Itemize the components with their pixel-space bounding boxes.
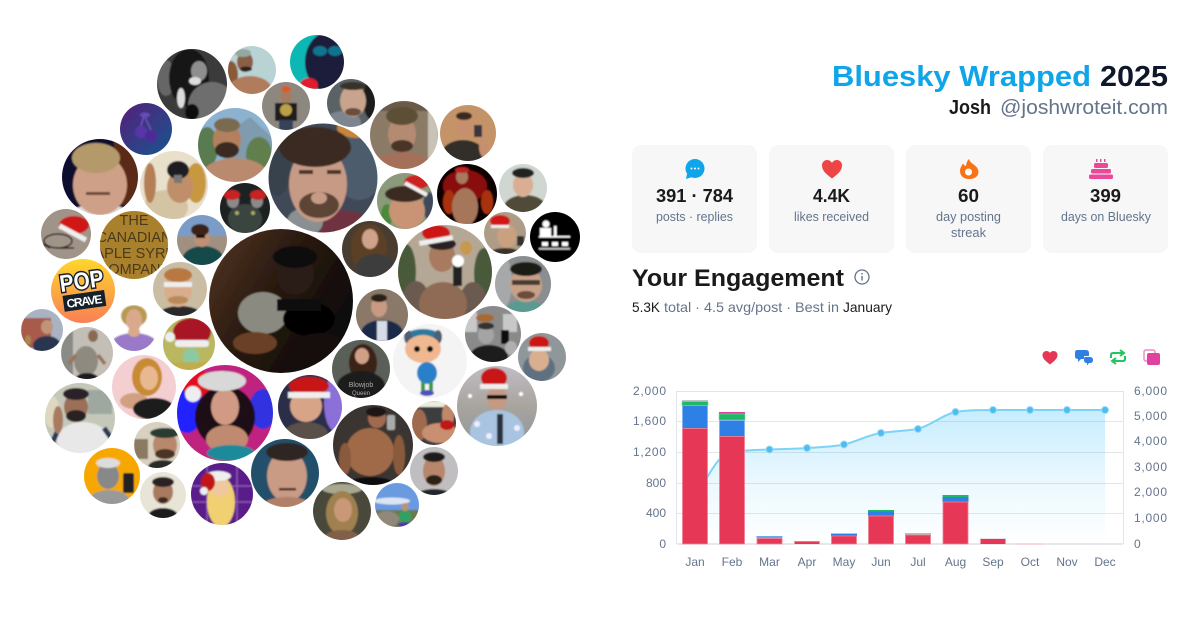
chart legend icons <box>1042 350 1160 366</box>
avatar: man in snow with santa hat <box>452 361 542 454</box>
avatar: cat with santa hats <box>220 183 270 233</box>
avatar: Squidward with santa hat <box>163 318 215 370</box>
bar: July <box>905 533 931 544</box>
month labels: Jul <box>910 555 926 569</box>
panel: posts and replies <box>632 145 757 253</box>
bar: August <box>942 495 968 544</box>
avatar: man in olive sweater <box>499 164 547 212</box>
icon: speech bubble <box>686 159 704 179</box>
avatar: man selfie in tank top <box>140 151 208 219</box>
bar: April <box>794 541 820 544</box>
avatar: bearded man in mountains <box>198 108 272 182</box>
month labels: May <box>833 555 855 569</box>
avatar: person on rocky beach <box>370 478 424 532</box>
stat label second line: streak <box>951 226 987 240</box>
bar: October <box>1017 544 1043 545</box>
avatar: curly haired man large <box>268 124 378 232</box>
right axis labels: 1,000 <box>1134 511 1167 525</box>
avatar: woman in black hoodie: Blowjob <box>349 382 373 389</box>
month labels: Jun <box>871 555 891 569</box>
avatar: Animal Crossing villager <box>393 324 467 398</box>
month labels: Dec <box>1094 555 1116 569</box>
avatar: blonde woman purple dress <box>114 305 154 351</box>
icon: flame centre <box>965 168 972 176</box>
month labels: Jan <box>685 555 705 569</box>
avatar: cherries icon <box>120 103 172 155</box>
stat value: 4.4K <box>813 186 850 206</box>
title: Bluesky Wrapped <box>832 61 1091 93</box>
avatar: woman with long wavy hair <box>342 221 398 277</box>
avatar: man in navy suit <box>356 289 408 341</box>
left axis labels: 2,000 <box>633 384 666 398</box>
stat value: 60 <box>958 186 979 206</box>
avatar: man on black and red poster <box>437 164 497 224</box>
avatar: videographer large dark portrait <box>209 229 353 373</box>
avatar: smiling man with santa hat <box>377 173 433 229</box>
avatar: man with santa hat and phone <box>484 212 526 254</box>
avatar: man with glasses in car <box>495 256 551 312</box>
cumulative line <box>695 410 1105 496</box>
bar: June <box>868 510 894 544</box>
stat label: days on Bluesky <box>1061 210 1152 224</box>
avatar: drag queen with santa hat <box>177 365 273 461</box>
icon: heart <box>822 160 842 178</box>
left axis labels: 0 <box>659 537 666 551</box>
icon: info <box>855 270 869 284</box>
stat label: day posting <box>936 210 1001 224</box>
avatar: man with orange beanie <box>262 82 310 130</box>
month labels: Sep <box>982 555 1004 569</box>
avatar: maple syrup company logo: COMPANY <box>98 262 170 278</box>
avatar: woman with tiara <box>308 477 376 545</box>
avatar: Pop Crave logo: POP <box>58 265 105 298</box>
avatar: shirtless man mirror selfie <box>328 400 418 490</box>
avatar: black and white man with antlers <box>465 306 521 362</box>
avatar: man in car <box>327 79 375 127</box>
stat value: 391 · 784 <box>656 186 733 206</box>
left axis labels: 1,600 <box>633 414 666 428</box>
avatar: man with santa hat purple light <box>278 375 342 439</box>
avatar: doodle with santa hat <box>41 209 91 259</box>
cumulative area <box>695 410 1105 544</box>
title year: 2025 <box>1100 61 1168 93</box>
right axis labels: 4,000 <box>1134 434 1167 448</box>
stat value: 399 <box>1090 186 1121 206</box>
bar: September <box>980 538 1006 544</box>
avatar: man taking mirror selfie <box>440 105 496 161</box>
right axis labels <box>1134 384 1167 551</box>
avatar: woman in black hoodie <box>332 340 390 398</box>
month labels: Aug <box>945 555 966 569</box>
month labels: Oct <box>1021 555 1040 569</box>
avatar: grayscale man on orange <box>79 443 145 510</box>
bar: March <box>756 536 782 544</box>
avatar: man with moustache <box>246 434 324 513</box>
icon: legend heart <box>1042 351 1058 364</box>
icon: birthday cake <box>1089 159 1113 179</box>
month labels: Mar <box>759 555 780 569</box>
avatar: Pop Crave logo: CRAVE <box>66 292 103 311</box>
avatar: maple syrup company logo <box>100 211 168 279</box>
left axis labels <box>633 384 666 551</box>
bar: May <box>831 533 857 544</box>
panel: likes received <box>769 145 894 253</box>
avatar: black and white woman <box>157 49 227 119</box>
avatar bubble cluster <box>16 30 585 545</box>
avatar: bearded man in white jersey <box>40 378 120 458</box>
left axis labels: 1,200 <box>633 445 666 459</box>
avatar: man in camo cap <box>370 101 438 169</box>
bar: February <box>719 412 745 544</box>
month labels: Apr <box>798 555 816 569</box>
month labels <box>685 555 1116 569</box>
icon: legend reposts <box>1111 350 1125 364</box>
cumulative points <box>766 406 1108 453</box>
avatar: man selfie with santa hat <box>398 225 492 319</box>
right axis labels: 2,000 <box>1134 485 1167 499</box>
avatar: man with sunglasses teal shirt <box>177 215 227 265</box>
display name: Josh <box>949 97 991 119</box>
avatar: woman in black hoodie: Queen <box>352 391 370 397</box>
panel: days on Bluesky <box>1043 145 1168 253</box>
left axis labels: 800 <box>646 476 666 490</box>
avatar: Darth Vader sunglasses <box>290 35 344 89</box>
chart gridlines <box>676 391 1124 544</box>
right axis labels: 6,000 <box>1134 384 1167 398</box>
avatar: maple syrup company logo: CANADIAN <box>97 230 171 246</box>
right axis labels: 5,000 <box>1134 409 1167 423</box>
engagement summary: 5.3K <box>632 299 661 315</box>
engagement summary: total · 4.5 avg/post · Best in <box>664 299 839 315</box>
stat label: likes received <box>794 210 869 224</box>
avatar: man with white sunglasses <box>153 262 207 316</box>
avatar: black diner icon <box>530 212 580 262</box>
avatar: man with goatee <box>135 467 191 524</box>
avatar: blonde woman pink background <box>112 355 176 419</box>
avatar: man in cap and beard <box>129 417 185 474</box>
avatar: Pop Crave logo <box>51 259 115 323</box>
avatar: cartoon blonde princess <box>186 458 258 530</box>
icon: legend quotes <box>1144 350 1160 365</box>
panel: day posting streak <box>906 145 1031 253</box>
left axis labels: 400 <box>646 506 666 520</box>
engagement summary <box>632 299 892 315</box>
engagement summary: January <box>843 299 892 315</box>
icon: flame <box>960 159 978 179</box>
right axis labels: 0 <box>1134 537 1141 551</box>
avatar: man mirror selfie gray shirt <box>61 327 113 379</box>
right axis labels: 3,000 <box>1134 460 1167 474</box>
stat label: posts · replies <box>656 210 733 224</box>
avatar: maple syrup company logo: MAPLE SYRUP <box>82 246 186 262</box>
heading: your engagement: Your Engagement <box>632 265 844 292</box>
handle: @joshwroteit.com <box>1000 97 1168 119</box>
avatar: shirtless man on couch <box>228 46 276 94</box>
icon: legend replies <box>1075 350 1093 366</box>
avatar: maple syrup company logo: THE <box>120 213 149 229</box>
bar: January <box>682 400 708 544</box>
avatar: older man with building <box>21 309 63 351</box>
month labels: Nov <box>1056 555 1078 569</box>
avatar: man with stubble gray background <box>405 442 463 501</box>
avatar: arm with santa hat <box>407 396 461 450</box>
engagement chart <box>633 384 1167 569</box>
month labels: Feb <box>722 555 743 569</box>
avatar: man in beige beanie <box>62 139 138 215</box>
avatar: man in hood with santa hat <box>518 333 566 381</box>
